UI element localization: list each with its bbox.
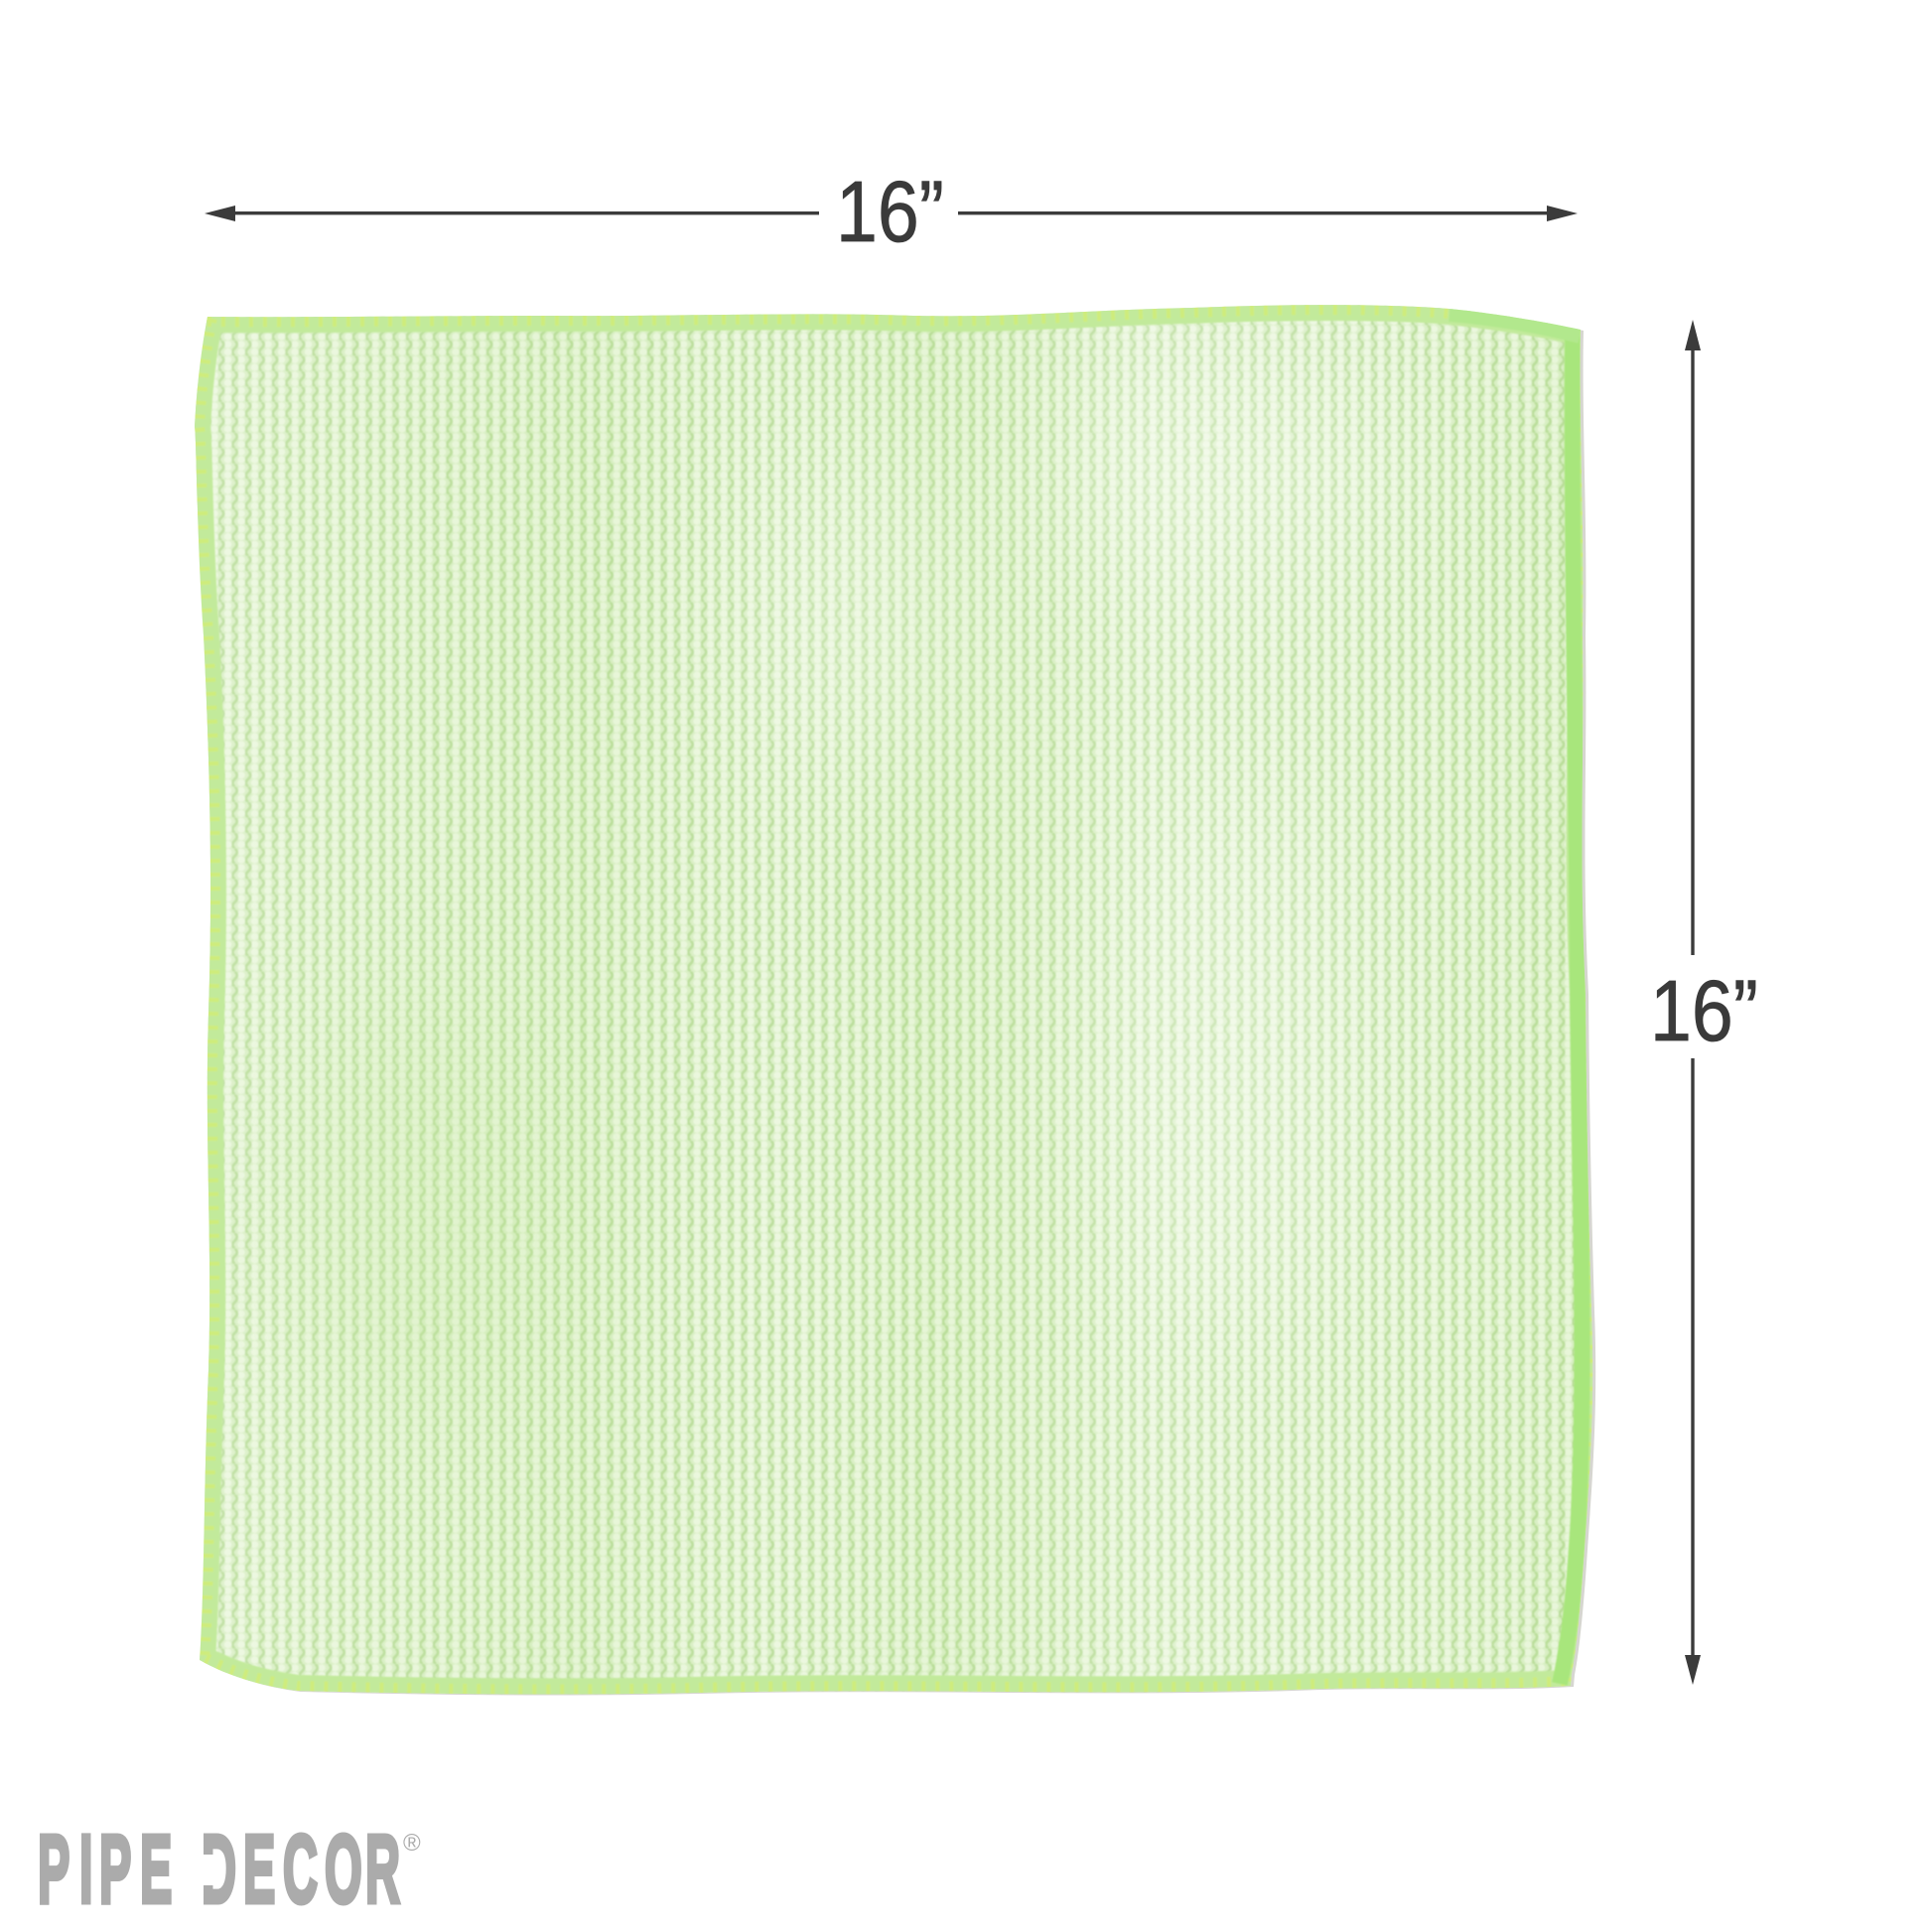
logo: Pipe Decor [38, 1817, 421, 1924]
arrow: bottom head and shaft [1685, 1058, 1701, 1685]
arrow: left head and shaft [205, 206, 819, 221]
width label 16 inches: 16” [836, 164, 944, 260]
width dimension arrow [205, 164, 1578, 260]
logo wordmark: PIPE DECOR [38, 1817, 400, 1924]
arrow: right head and shaft [958, 206, 1578, 221]
logo registered mark: ® [403, 1830, 421, 1857]
arrow: top head and shaft [1685, 320, 1701, 955]
towel shadow [198, 306, 1595, 1695]
towel stitched hem [195, 305, 1592, 1694]
towel waffle fabric [189, 298, 1598, 1708]
towel [189, 298, 1598, 1708]
height label 16 inches: 16” [1650, 963, 1758, 1059]
logo letter D cut-out [202, 1855, 215, 1885]
height dimension arrow [1650, 320, 1758, 1685]
